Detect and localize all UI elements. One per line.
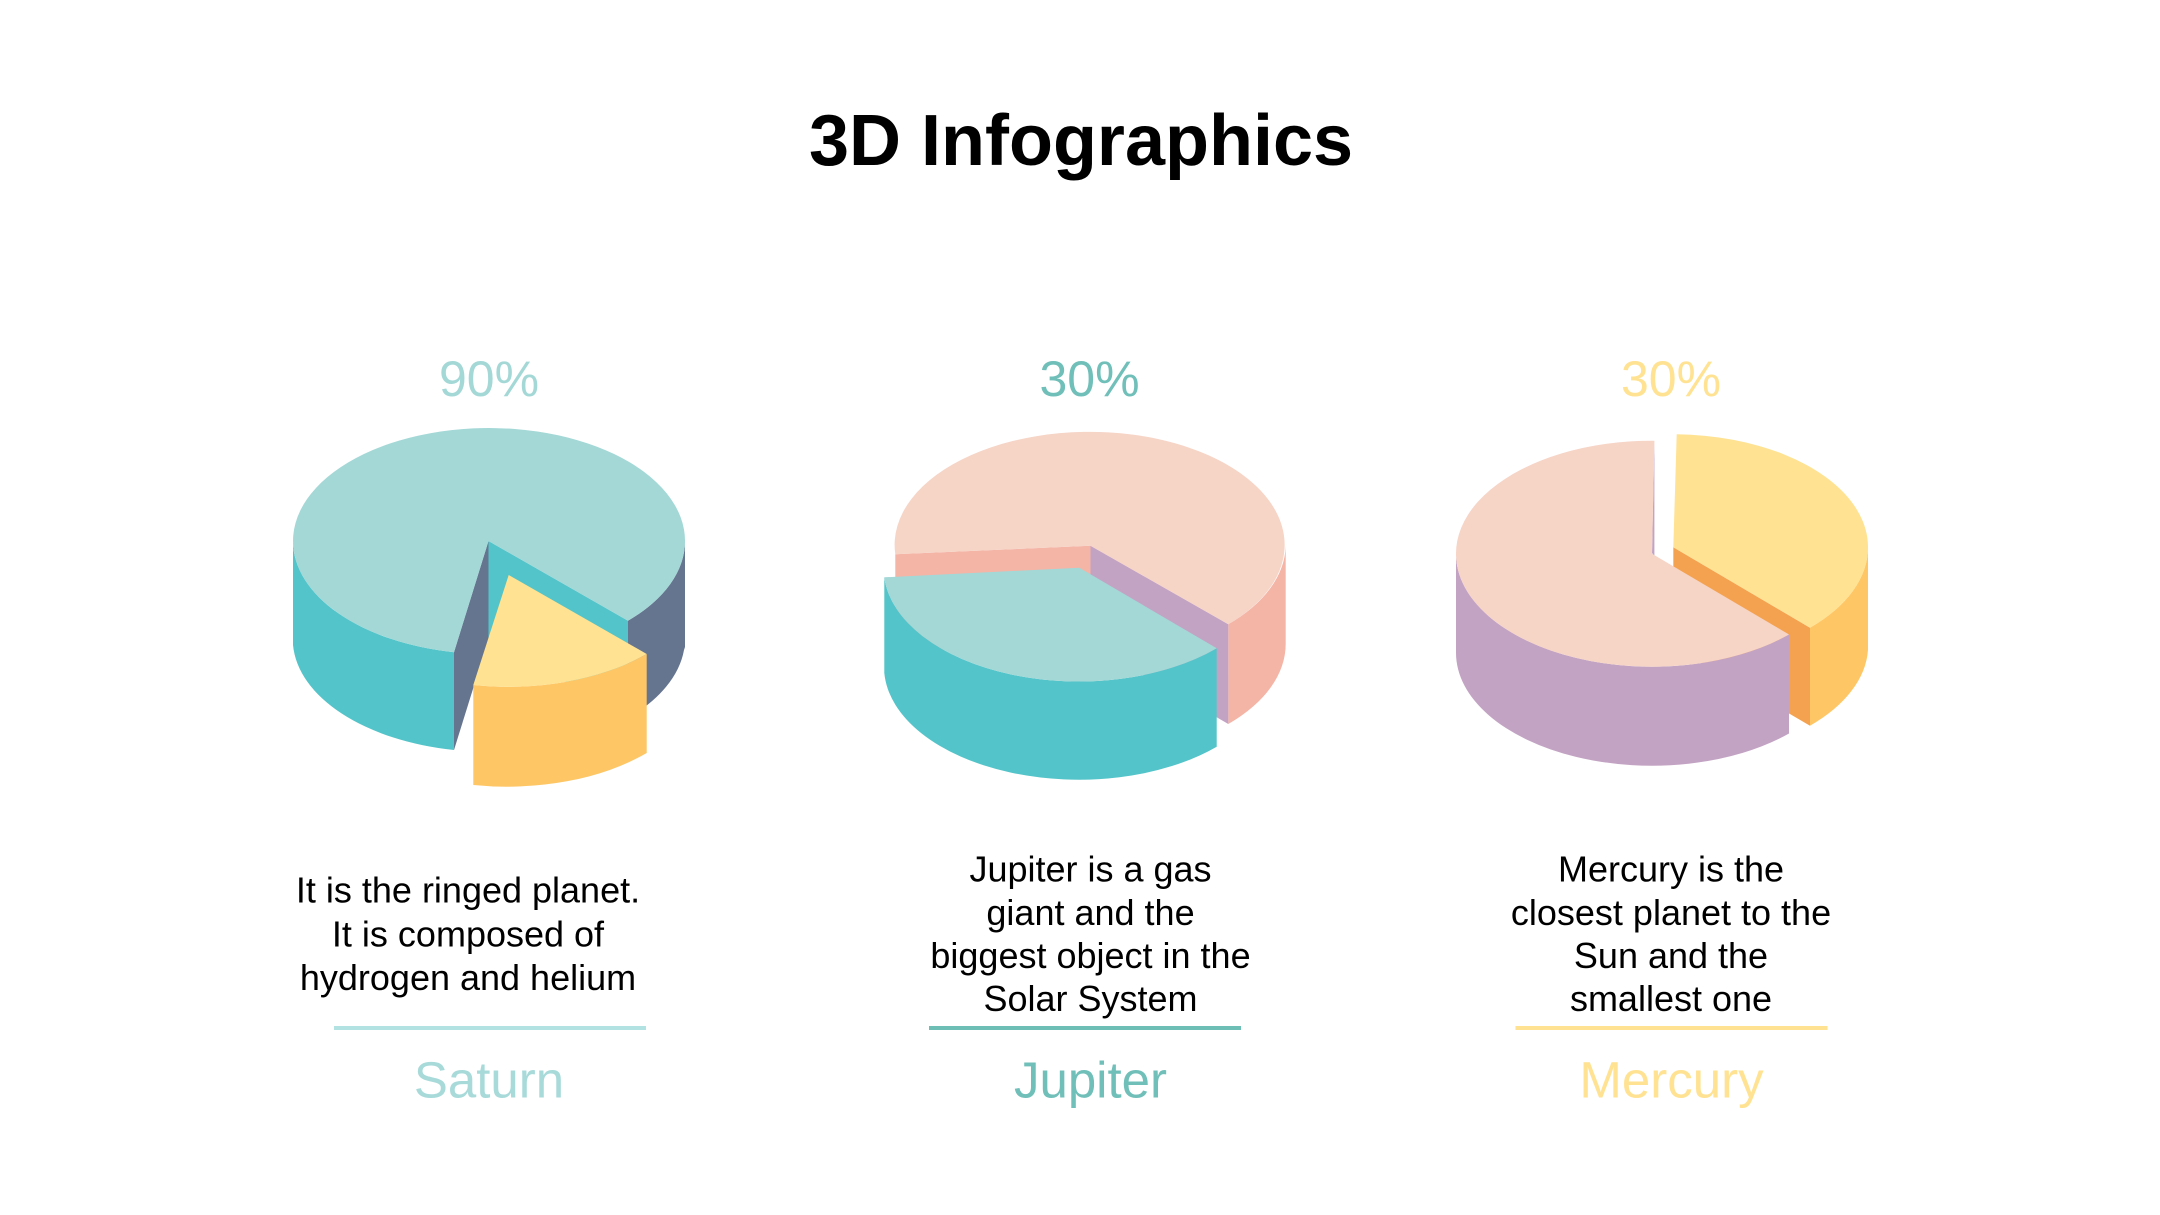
description: Jupiter: biggest object in the	[930, 935, 1251, 976]
panel: Jupiter	[884, 351, 1286, 1108]
divider line: Mercury	[1516, 1026, 1828, 1030]
divider line: Saturn	[334, 1026, 646, 1030]
panel: Saturn	[293, 351, 685, 1108]
label: Saturn: Saturn	[414, 1052, 564, 1108]
title: 3D Infographics	[809, 101, 1353, 181]
separated slice top: Mercury	[1673, 434, 1868, 628]
description: Mercury: smallest one	[1570, 978, 1772, 1019]
description: Mercury: closest planet to the	[1511, 892, 1831, 933]
pie chart: Saturn	[293, 428, 685, 787]
exploded slice: Saturn	[473, 575, 647, 787]
pie chart: Mercury	[1456, 434, 1868, 766]
description: Saturn: It is composed of	[332, 914, 605, 954]
description: Jupiter: Jupiter is a gas	[969, 848, 1212, 890]
description: Saturn: hydrogen and helium	[300, 957, 636, 998]
label: Jupiter: Jupiter	[1014, 1052, 1167, 1108]
pie chart: Jupiter	[884, 432, 1286, 780]
percentage: Saturn 90%: 90%	[439, 351, 539, 407]
divider line: Jupiter	[929, 1026, 1241, 1030]
description: Saturn: It is the ringed planet.	[296, 870, 640, 910]
label: Mercury: Mercury	[1579, 1052, 1764, 1108]
description: Jupiter: giant and the	[986, 892, 1195, 933]
description: Mercury: Mercury is the	[1558, 848, 1784, 890]
panel: Mercury	[1456, 351, 1868, 1108]
exploded slice: Jupiter	[884, 568, 1217, 780]
description: Jupiter: Solar System	[983, 978, 1198, 1019]
percentage: Mercury 30%: 30%	[1621, 351, 1721, 407]
percentage: Jupiter 30%: 30%	[1039, 351, 1140, 407]
description: Mercury: Sun and the	[1574, 935, 1768, 976]
